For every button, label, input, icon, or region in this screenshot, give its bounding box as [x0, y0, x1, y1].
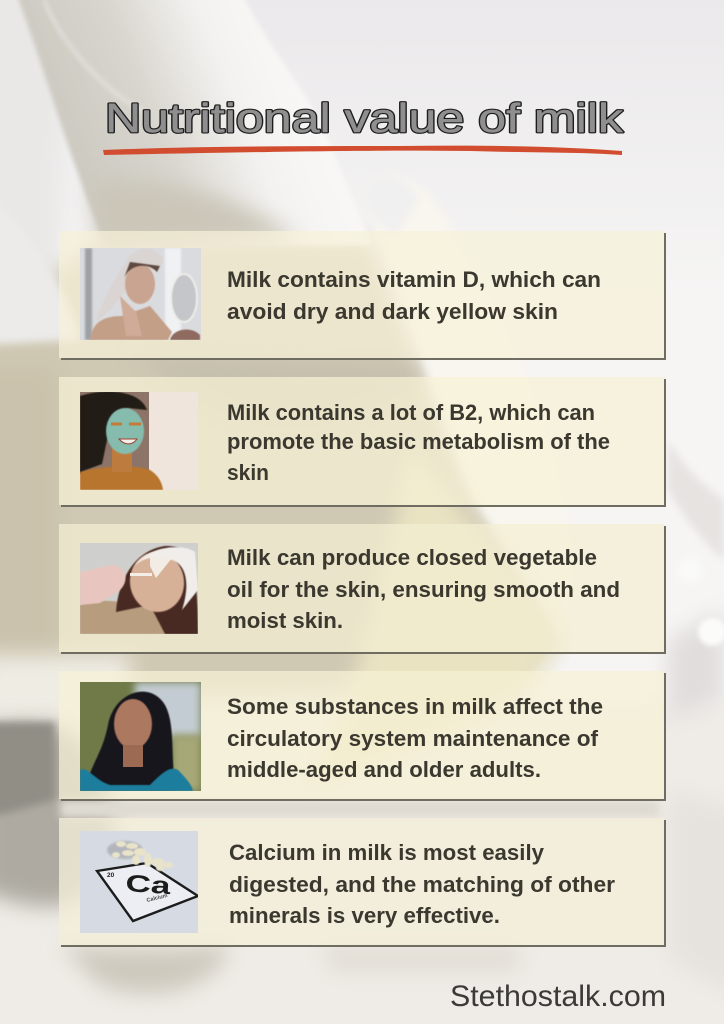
footer: website name: Stethostalk.com [450, 980, 666, 1013]
panel: circulatory system [59, 671, 666, 801]
photo: calcium element tile with pills: Calcium [146, 893, 168, 904]
text: vitamin B2: Milk contains a lot of B2, which can [227, 400, 595, 425]
text: calcium: Calcium in milk is most easily [229, 840, 544, 865]
panel: calcium [59, 818, 666, 947]
photo: calcium element tile with pills: Ca [125, 870, 172, 900]
panel: vitamin B2: promote the basic metabolism of the [227, 429, 610, 454]
panel: vegetable oil [59, 524, 666, 654]
panel: calcium: minerals is very effective. [229, 903, 500, 928]
title underline: red brush stroke [103, 146, 622, 155]
panel: circulatory system: circulatory system maintenance of [227, 726, 599, 751]
title: Nutritional value of milk [105, 95, 624, 141]
panel: vitamin B2 [59, 377, 666, 507]
panel: vitamin D [59, 231, 666, 360]
panel: circulatory system: middle-aged and older adults. [227, 757, 541, 782]
photo: woman in towel with mirror [80, 248, 201, 340]
photo: calcium element tile with pills: 20 [107, 872, 115, 879]
title: Nutritional value of milk [105, 95, 624, 141]
photo: smiling older woman [80, 682, 201, 791]
panel: vitamin B2: skin [227, 460, 269, 485]
panel: vitamin D: avoid dry and dark yellow skin [227, 299, 558, 324]
panel: calcium: digested, and the matching of other [229, 872, 615, 897]
photo: calcium element tile with pills [80, 831, 198, 933]
panel: vegetable oil: moist skin. [227, 608, 343, 633]
photo: woman with green face mask [80, 392, 198, 490]
text: vitamin D: Milk contains vitamin D, which can [227, 267, 601, 292]
photo: facial treatment [80, 543, 198, 634]
text: circulatory system: Some substances in milk affect the [227, 694, 603, 719]
text: vegetable oil: Milk can produce closed vegetable [227, 545, 597, 570]
panel: vegetable oil: oil for the skin, ensuring smooth and [227, 577, 620, 602]
